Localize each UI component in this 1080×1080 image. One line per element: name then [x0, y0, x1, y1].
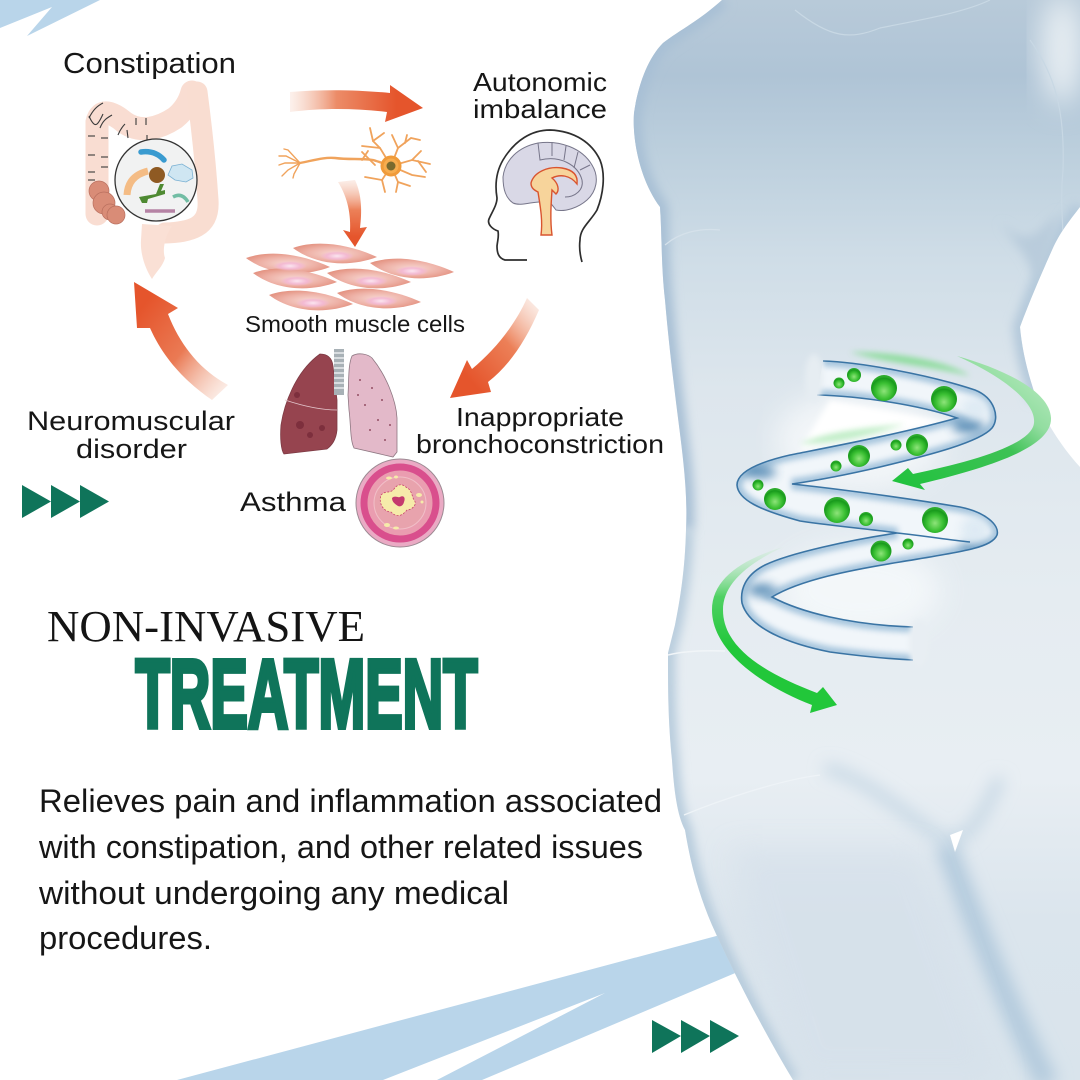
label: inappropriate bronchoconstriction — [416, 402, 664, 459]
label: inappropriate bronchoconstriction: bronchoconstriction — [416, 429, 664, 459]
heading: autonomic imbalance: imbalance — [473, 94, 607, 124]
green glow sweeps — [800, 352, 970, 444]
illustration: colon — [88, 92, 208, 279]
ribbon edges — [737, 361, 997, 660]
gut microbiome circle — [115, 139, 197, 221]
label: neuromuscular disorder: Neuromuscular — [27, 406, 235, 436]
heading: autonomic imbalance — [473, 67, 607, 124]
body text: without undergoing any medical — [38, 875, 509, 911]
ribbon end fades — [805, 354, 823, 402]
faint garment lines — [795, 0, 990, 35]
illustration: lungs — [281, 349, 397, 457]
green arrow: upper — [892, 356, 1051, 490]
label: smooth muscle cells: Smooth muscle cells — [245, 311, 465, 337]
label: neuromuscular disorder — [27, 406, 235, 464]
heading: constipation: Constipation — [63, 48, 236, 80]
swollen section — [89, 181, 125, 224]
heading: autonomic imbalance: Autonomic — [473, 67, 607, 97]
illustration: brain in head — [489, 130, 603, 262]
icon: triple chevrons left — [22, 485, 109, 518]
body silhouette — [634, 0, 1080, 1080]
decorative blue shard bottom — [177, 931, 740, 1080]
body text — [38, 783, 662, 956]
label: neuromuscular disorder: disorder — [76, 434, 187, 464]
central glow — [775, 390, 945, 490]
body text: procedures. — [39, 920, 212, 956]
green particles — [752, 368, 957, 562]
title: non-invasive: NON-INVASIVE — [47, 602, 365, 651]
ribbon shading — [737, 361, 997, 660]
illustration: neuron — [279, 128, 430, 192]
label: inappropriate bronchoconstriction: Inappropriate — [456, 402, 624, 432]
pelvis to thigh crease — [825, 768, 1000, 840]
red arrow: left — [134, 282, 228, 400]
label: asthma: Asthma — [240, 487, 347, 517]
illustration: bronchus cross-section — [356, 459, 444, 547]
gap between thighs — [950, 830, 963, 852]
body text: Relieves pain and inflammation associated — [39, 783, 662, 819]
chest crease — [1012, 222, 1052, 270]
decorative blue shard top left — [0, 0, 100, 36]
body text: with constipation, and other related issues — [38, 829, 643, 865]
red arrow: lower right — [450, 298, 539, 398]
illustration: smooth muscle cells — [246, 244, 454, 310]
red arrow: down — [338, 180, 367, 247]
helix with green particles — [737, 352, 997, 667]
red arrow: top — [290, 85, 423, 122]
ribbon fill — [737, 361, 997, 660]
title: treatment: TREATMENT — [136, 640, 478, 748]
icon: triple chevrons bottom — [652, 1020, 739, 1053]
green arrow: lower — [712, 547, 837, 713]
colon haustra marks — [88, 103, 147, 180]
